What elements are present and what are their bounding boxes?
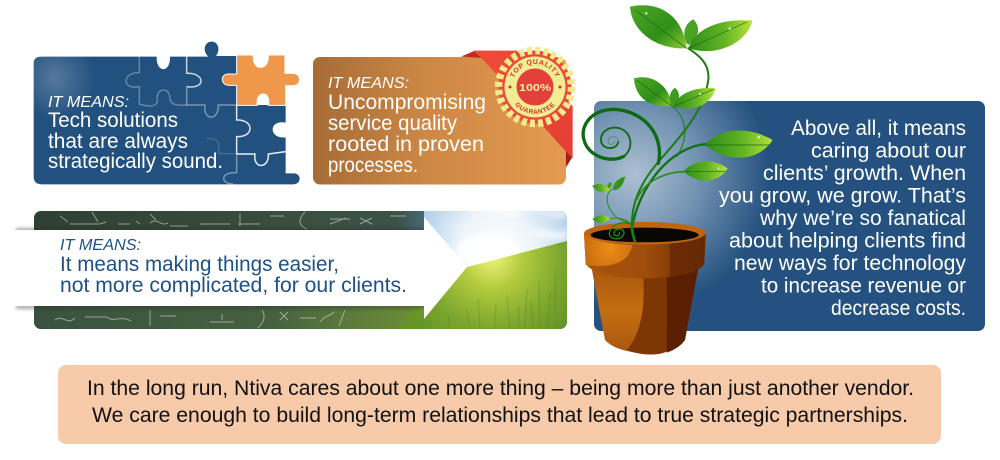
panel: closing statement (58, 365, 941, 444)
panel: chalkboard to field photo (0, 211, 567, 329)
text: tech solutions: strategically sound. (48, 150, 223, 173)
text: above all: you grow, we grow. That’s (719, 184, 966, 208)
pot body (592, 268, 698, 355)
puzzle shape (34, 42, 300, 184)
white arrow (0, 217, 467, 319)
orange puzzle piece (222, 55, 300, 105)
text: tech solutions (48, 109, 223, 173)
text: above all: decrease costs. (831, 297, 966, 320)
peach box (58, 365, 941, 444)
text: uncompromising service: rooted in proven (328, 133, 484, 156)
text: above all: new ways for technology (734, 252, 966, 275)
text: making things easier (60, 253, 407, 297)
text: it means: IT MEANS: (60, 237, 141, 254)
text: uncompromising service: service quality (328, 112, 457, 135)
text: above all (719, 117, 966, 320)
panel: tech solutions puzzle (34, 42, 300, 184)
illustration: plant in pot (583, 5, 773, 355)
text: long run: In the long run, Ntiva cares about one more thing – being more than just another vendor. (87, 377, 914, 400)
text: making things easier: not more complicated, for our clients. (60, 274, 407, 297)
badge: top quality: 100% (519, 82, 552, 94)
text: above all: Above all, it means (791, 117, 966, 140)
arrow shadow (16, 228, 424, 309)
text: long run: We care enough to build long-term relationships that lead to true strategic partnerships. (92, 404, 908, 427)
text: it means: IT MEANS: (48, 94, 129, 111)
blue card (594, 101, 985, 331)
badge: top quality (494, 46, 576, 128)
text: above all: caring about our (811, 140, 966, 162)
leaves (592, 5, 773, 223)
text: it means: IT MEANS: (328, 75, 409, 92)
ribbon (461, 51, 573, 167)
text: making things easier: It means making things easier, (60, 253, 339, 276)
text: tech solutions: Tech solutions (48, 109, 178, 132)
text: uncompromising service (328, 91, 486, 177)
text: tech solutions: that are always (48, 130, 188, 153)
text: above all: about helping clients find (729, 230, 966, 252)
pot rim front (584, 233, 706, 278)
text: above all: to increase revenue or (761, 274, 966, 298)
text: uncompromising service: Uncompromising (328, 91, 486, 114)
text: uncompromising service: processes. (328, 154, 418, 177)
photo (34, 211, 567, 329)
badge: top quality: GUARANTEE (516, 102, 555, 114)
orange card (313, 57, 566, 184)
panel: service quality (313, 46, 576, 184)
stems (583, 48, 708, 242)
badge: top quality: TOP QUALITY (510, 59, 560, 76)
text: above all: clients’ growth. When (763, 162, 966, 185)
text: long run (87, 377, 914, 427)
text: above all: why we’re so fanatical (759, 207, 966, 230)
pot rim top and soil (584, 222, 706, 245)
panel: caring about growth (594, 101, 985, 331)
